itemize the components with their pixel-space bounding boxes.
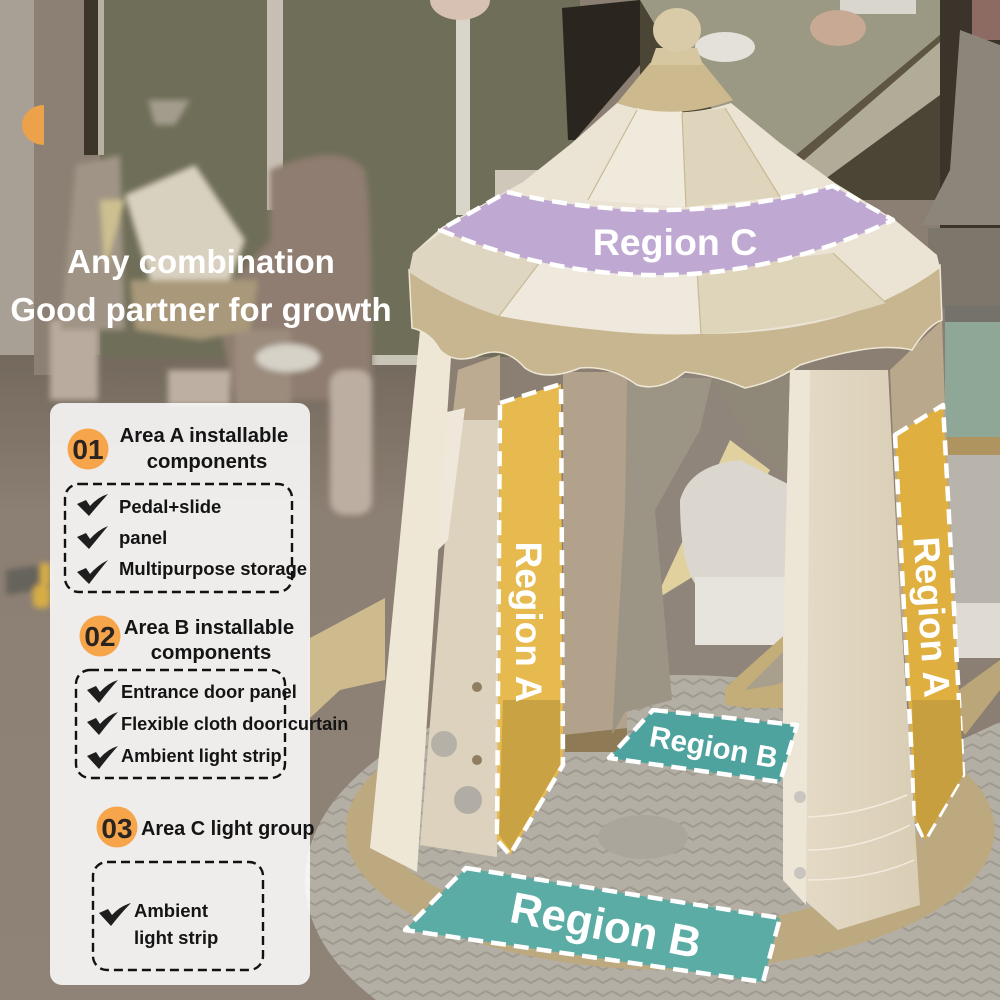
Region B label back: Region B (647, 720, 780, 775)
rug (305, 675, 1000, 1000)
tent roof (409, 8, 942, 388)
section 01: 01 (72, 434, 104, 465)
Region A label left: Region A (508, 541, 549, 703)
list box A: Pedal+slide (119, 496, 221, 517)
roof finial (617, 63, 733, 112)
list box A: Multipurpose storage (119, 558, 307, 579)
section 03: Area C light group (141, 818, 314, 840)
title (10, 243, 392, 328)
back panel and curtain (563, 372, 790, 752)
section 01 (68, 425, 288, 473)
Region B label front: Region B (506, 883, 705, 968)
section 01: Area A installable (120, 425, 288, 447)
list box B: Ambient light strip (121, 746, 282, 766)
panel: installable components (50, 403, 348, 985)
title: Any combination (67, 243, 335, 280)
list box C: light strip (134, 927, 218, 948)
slide behind tent (310, 598, 385, 718)
section 02: 02 (84, 621, 116, 652)
list box B: Entrance door panel (121, 682, 297, 702)
mats (725, 630, 1000, 735)
tent base ring (346, 700, 994, 970)
roof valance (409, 265, 942, 388)
section 02: Area B installable (124, 617, 294, 639)
list box A (65, 484, 307, 592)
title: Good partner for growth (10, 291, 392, 328)
Region C highlight (440, 186, 893, 275)
section 03: 03 (101, 813, 133, 844)
blurred stool and lamp behind title (6, 100, 372, 608)
Region B highlight front (405, 868, 780, 982)
roof cream panels (409, 103, 940, 334)
list box B (76, 670, 348, 778)
list box A: panel (119, 527, 167, 548)
section 02: components (151, 642, 271, 664)
section 01: components (147, 451, 267, 473)
section 03 (96, 806, 314, 848)
list box C: Ambient (134, 900, 208, 921)
Region A label right: Region A (905, 535, 958, 699)
tent pillars (370, 320, 963, 930)
icon: orange half ball (22, 105, 44, 145)
Region B highlight back (609, 710, 797, 782)
Region A highlight right (895, 405, 963, 840)
Region A highlight left (497, 384, 563, 855)
section 02 (80, 616, 294, 664)
list box C (93, 862, 263, 970)
Region C label: Region C (593, 221, 757, 263)
list box B: Flexible cloth door curtain (121, 714, 348, 734)
